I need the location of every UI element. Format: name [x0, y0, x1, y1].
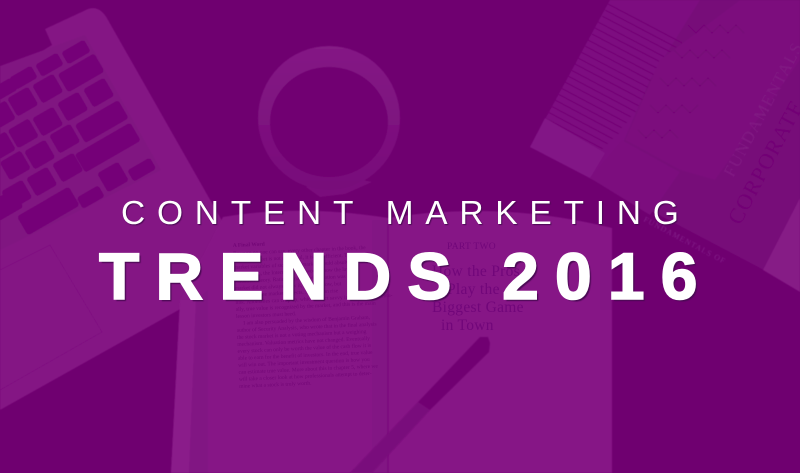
book right page heading: How the Pros	[432, 263, 520, 280]
book right page heading: Play the	[447, 281, 500, 298]
keyboard keys	[0, 39, 156, 236]
laptop	[0, 8, 250, 410]
book left page text: market did not always show it, but it is slow, but	[235, 281, 342, 292]
book right page heading: Biggest Game	[432, 299, 524, 316]
title line: trends 2016: TRENDS 2016	[99, 239, 714, 313]
book left page text: market variables of stocks and markets could absolve from	[234, 258, 364, 271]
book left page text: can estimate true value. More about this in chapter 5, where we	[238, 364, 379, 376]
book right page heading	[432, 242, 524, 334]
pale book corner	[763, 198, 800, 292]
book left page text: author of Security Analysis, who wrote that in the final analysis	[236, 321, 377, 334]
title line: content marketing: CONTENT MARKETING	[121, 195, 691, 232]
book left page text: A Final Word	[233, 242, 265, 249]
trackpad	[0, 245, 102, 390]
book left page text: I am also persuaded by the wisdom of Benjamin Graham,	[243, 314, 371, 327]
book left page text: recent crash, the Internet bubble would show the laws	[234, 267, 353, 278]
book left page text: will win out. The important investment question is how you	[238, 357, 370, 369]
book left page text: the stock market is not a voting mechanism but a weighing	[237, 329, 367, 341]
book left page text: link. Anomalies can crop up, which attract savvy investors. But eventu-	[235, 293, 393, 306]
book left page text: able to earn for the benefit of investors. In the end, true value	[238, 349, 373, 362]
book cover title: FUNDAMENTALS OF	[642, 215, 727, 266]
book left page text: eventually, the market corrects. Stocks can rise	[235, 288, 339, 299]
book cover title	[642, 39, 800, 266]
book left page text: Because no one can say, every other chapter in the book, the	[233, 245, 366, 257]
open book	[171, 211, 612, 473]
pen	[350, 337, 490, 473]
book left page text: mechanism. Valuation metrics have not changed. Eventually	[237, 336, 370, 348]
book left page text: every stock can only be worth the value of the cash flow it is	[237, 342, 371, 355]
book left page text: mine what a stock is truly worth.	[239, 381, 312, 390]
book left page text: lesson investors must heed.	[236, 311, 297, 320]
book right page heading: PART TWO	[447, 242, 496, 252]
book left page text: will take a closer look at how professionals attempt to deter-	[239, 370, 372, 383]
bound fabric book	[530, 0, 800, 292]
striped fabric swatches	[530, 0, 700, 185]
book left page text	[233, 236, 397, 390]
book left page text: valuation theory. Rational market of valuation was the	[234, 273, 354, 285]
coffee cup	[258, 46, 400, 197]
book left page text: ally, true value is recognized by the market, and this is the main	[236, 301, 376, 313]
book right page heading: in Town	[441, 317, 494, 334]
book left page text: Internet market is not a rational, it is not efficient. The	[233, 252, 353, 264]
